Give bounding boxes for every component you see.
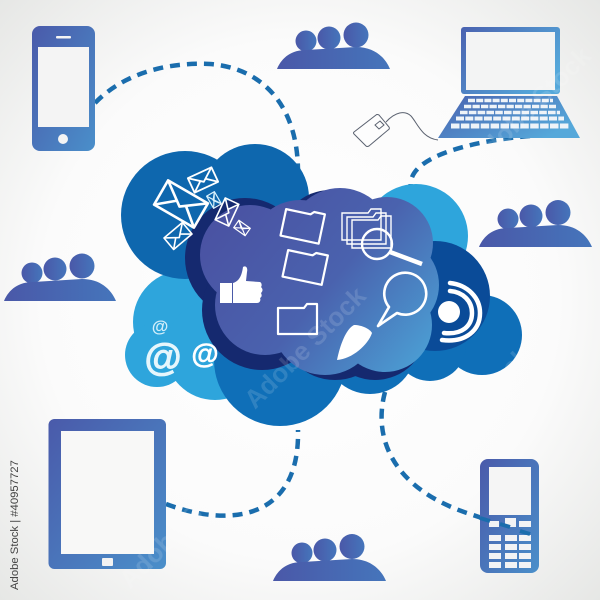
stock watermark: Adobe Stock xyxy=(403,340,537,474)
back cloud: bottom mid blue xyxy=(214,294,522,426)
back cloud: dark blue behind wifi xyxy=(380,241,490,351)
stock watermark: Adobe Stock xyxy=(113,460,247,594)
icon: at signs: @ xyxy=(152,317,168,336)
people group: right xyxy=(479,200,592,247)
back cloud: left light blue xyxy=(125,270,265,400)
dashed connector: feature phone to cloud xyxy=(382,392,530,534)
device: smartphone xyxy=(32,26,95,151)
icon: folders xyxy=(278,206,328,334)
icon: computer mouse with cable xyxy=(354,113,438,146)
people group: top xyxy=(277,22,390,69)
laptop keyboard xyxy=(451,100,569,126)
people group: left xyxy=(4,254,116,301)
stock watermark: Adobe Stock xyxy=(463,40,597,174)
stock watermark: Adobe Stock xyxy=(238,280,372,414)
icon: speech bubble and brush xyxy=(337,273,426,360)
people group: bottom xyxy=(273,534,386,581)
stock watermark: Adobe Stock xyxy=(43,85,177,219)
icon: wifi signal xyxy=(438,283,480,340)
cloud cluster xyxy=(121,144,522,426)
front cloud xyxy=(200,188,439,375)
icon: at signs xyxy=(144,317,219,379)
icon: envelopes xyxy=(154,167,250,249)
icon: stacked folders with magnifier xyxy=(342,209,422,264)
device: feature phone xyxy=(480,459,539,573)
back cloud: upper left blue xyxy=(121,144,309,300)
icon: thumbs up xyxy=(220,266,262,303)
device: tablet xyxy=(48,419,166,569)
icon: at signs: @ xyxy=(144,337,182,379)
device: laptop xyxy=(438,27,580,138)
back cloud: upper right light blue xyxy=(364,184,468,288)
stock credit: Adobe Stock | #40957727 xyxy=(9,460,21,590)
icon: at signs: @ xyxy=(191,338,219,369)
dashed connector: laptop to cloud xyxy=(411,136,530,188)
navy cloud outline xyxy=(185,190,427,380)
dashed connector: phone to cloud xyxy=(95,64,298,172)
dashed connector: tablet to cloud xyxy=(166,430,298,516)
